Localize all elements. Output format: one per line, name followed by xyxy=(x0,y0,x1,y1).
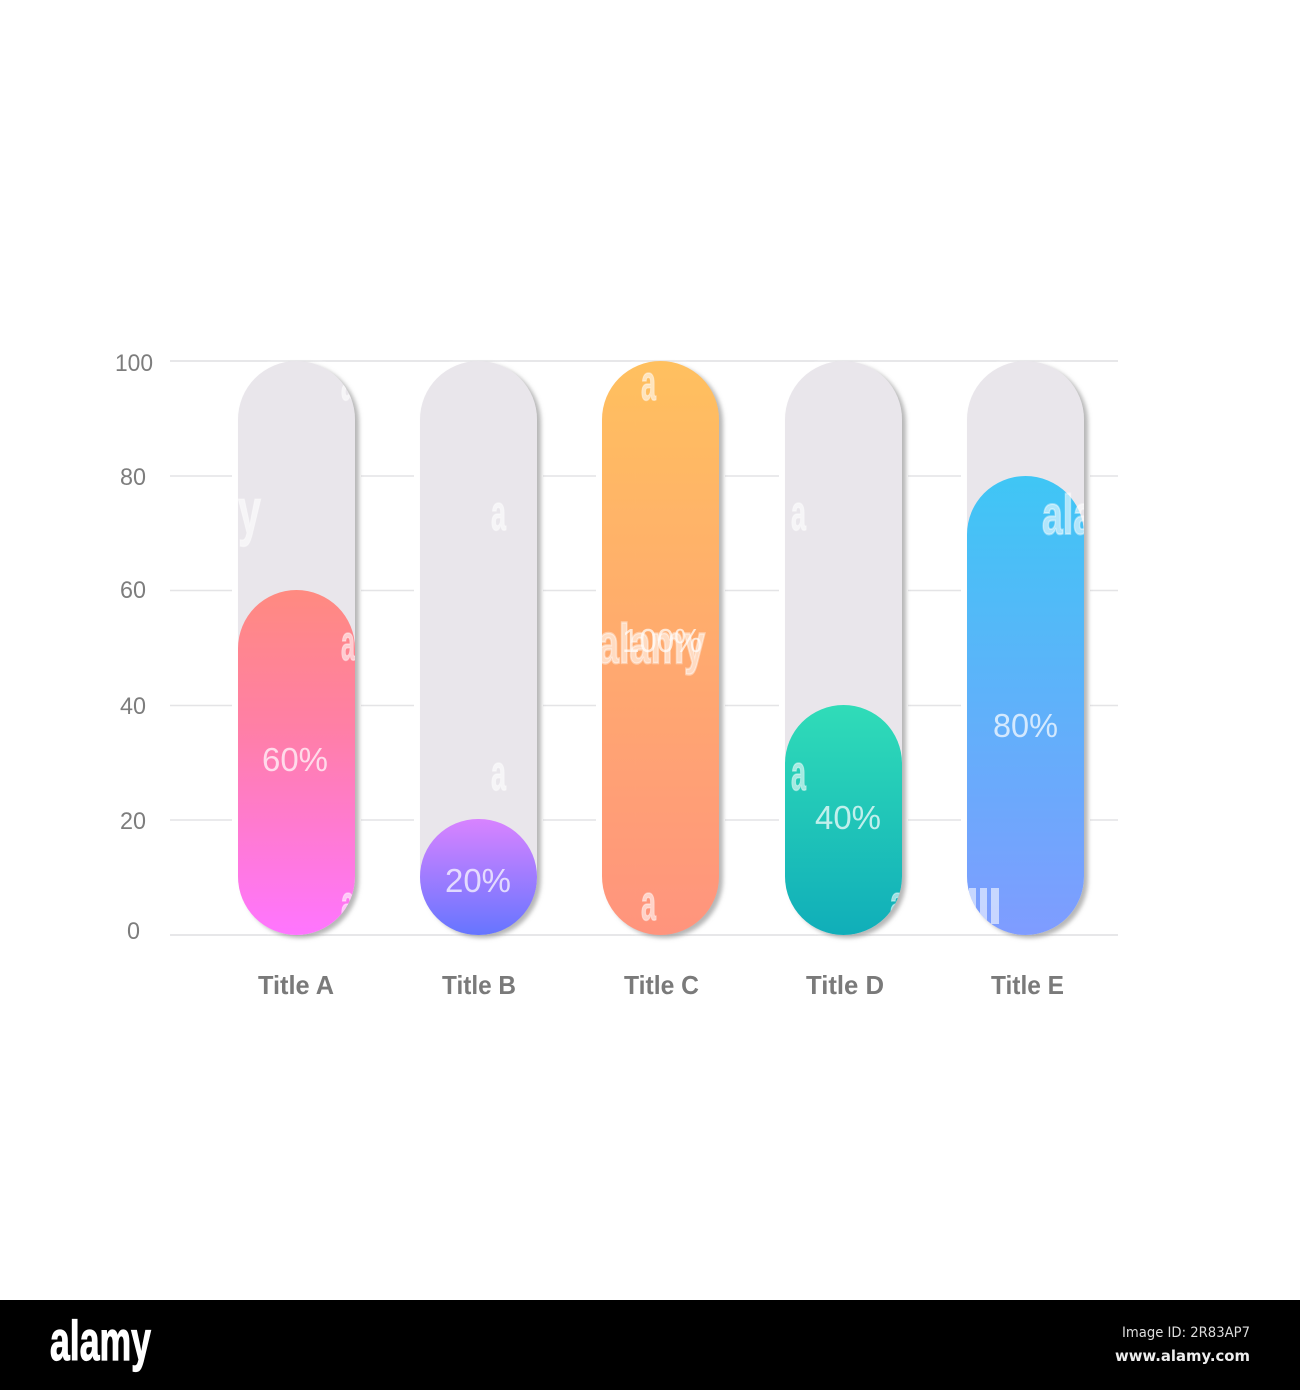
value labels: 100% xyxy=(622,622,702,659)
watermark fragments: a xyxy=(341,355,356,411)
watermark fragments xyxy=(238,355,1095,931)
bar tracks halo xyxy=(232,355,1090,941)
value labels xyxy=(262,622,1058,899)
watermark fragments: a xyxy=(491,485,507,541)
watermark fragments: a xyxy=(890,875,906,931)
watermark fragments: y xyxy=(238,475,261,547)
chart gridlines xyxy=(170,361,1118,935)
value labels: 20% xyxy=(445,862,511,899)
bar E: 80% xyxy=(967,361,1084,935)
y axis labels: 100 xyxy=(115,350,153,377)
bar B: 20% xyxy=(420,361,537,935)
y axis labels: 0 xyxy=(127,918,140,945)
website: www.alamy.com xyxy=(1115,1347,1250,1365)
watermark fragments: alamy xyxy=(598,612,705,675)
y axis labels: 20 xyxy=(120,808,146,835)
watermark fragments: a xyxy=(491,745,507,801)
value labels: 80% xyxy=(993,707,1058,744)
value labels: 40% xyxy=(815,799,881,836)
watermark fragments: a xyxy=(791,745,807,801)
bar A: 60% xyxy=(238,361,355,935)
y axis labels: 40 xyxy=(120,693,146,720)
watermark fragments: a xyxy=(641,355,657,411)
bar titles: Title A xyxy=(258,970,334,1000)
bar titles: Title D xyxy=(806,970,884,1000)
y axis labels xyxy=(115,350,153,945)
bar titles: Title E xyxy=(991,970,1064,1000)
footer logo: alamy xyxy=(50,1309,151,1372)
y axis labels: 80 xyxy=(120,464,146,491)
watermark fragments: a xyxy=(341,875,356,931)
watermark fragments: a xyxy=(341,615,356,671)
bar C: 100% xyxy=(602,361,719,935)
baseline and top gridline over halo xyxy=(170,361,1118,935)
watermark fragments: a xyxy=(641,875,657,931)
bar titles: Title B xyxy=(442,970,516,1000)
footer bar xyxy=(0,1300,1300,1390)
y axis labels: 60 xyxy=(120,577,146,604)
image id: Image ID: 2R83AP7 xyxy=(1122,1325,1250,1341)
watermark fragments: a xyxy=(791,485,807,541)
bar titles xyxy=(258,970,1064,1000)
bar titles: Title C xyxy=(624,970,699,1000)
value labels: 60% xyxy=(262,741,328,778)
bar D: 40% xyxy=(785,361,902,935)
watermark fragments: ala xyxy=(1042,483,1095,546)
